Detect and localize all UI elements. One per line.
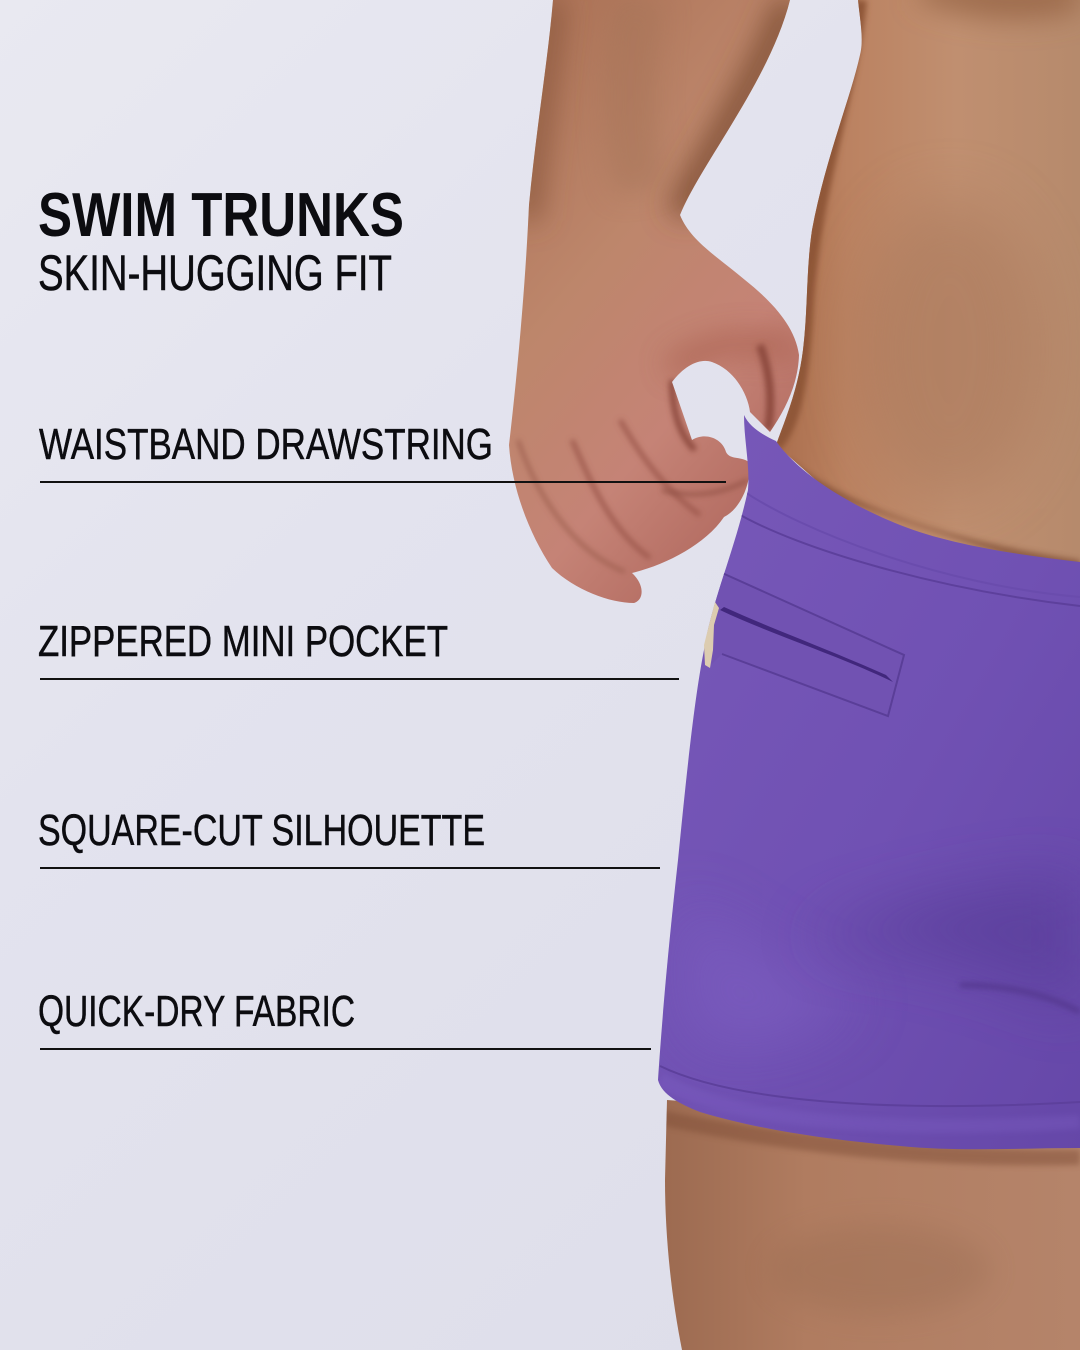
subtitle: SKIN-HUGGING FIT — [38, 245, 392, 301]
feature: zippered mini pocket: ZIPPERED MINI POCKET — [38, 617, 448, 666]
feature: square-cut silhouette: SQUARE-CUT SILHOUETTE — [38, 806, 485, 855]
thigh — [660, 1090, 1080, 1350]
pocket welt — [714, 574, 724, 606]
trunks body — [650, 410, 1080, 1155]
finger creases — [518, 440, 625, 572]
hem seam — [660, 1066, 1080, 1106]
feature: waistband drawstring: WAISTBAND DRAWSTRING — [39, 420, 493, 469]
torso — [770, 0, 1080, 600]
fabric highlight — [727, 980, 760, 1006]
arm and hand — [500, 0, 810, 610]
swim trunks — [650, 410, 1080, 1155]
waistband seam — [735, 512, 1080, 606]
photo: model wearing purple swim trunks — [500, 0, 1080, 1350]
title: SWIM TRUNKS — [38, 181, 404, 250]
title block — [38, 181, 404, 301]
zipper pull — [704, 602, 719, 668]
pocket opening — [720, 607, 893, 682]
feature: quick-dry fabric: QUICK-DRY FABRIC — [38, 987, 355, 1036]
crotch shading — [881, 885, 1073, 981]
